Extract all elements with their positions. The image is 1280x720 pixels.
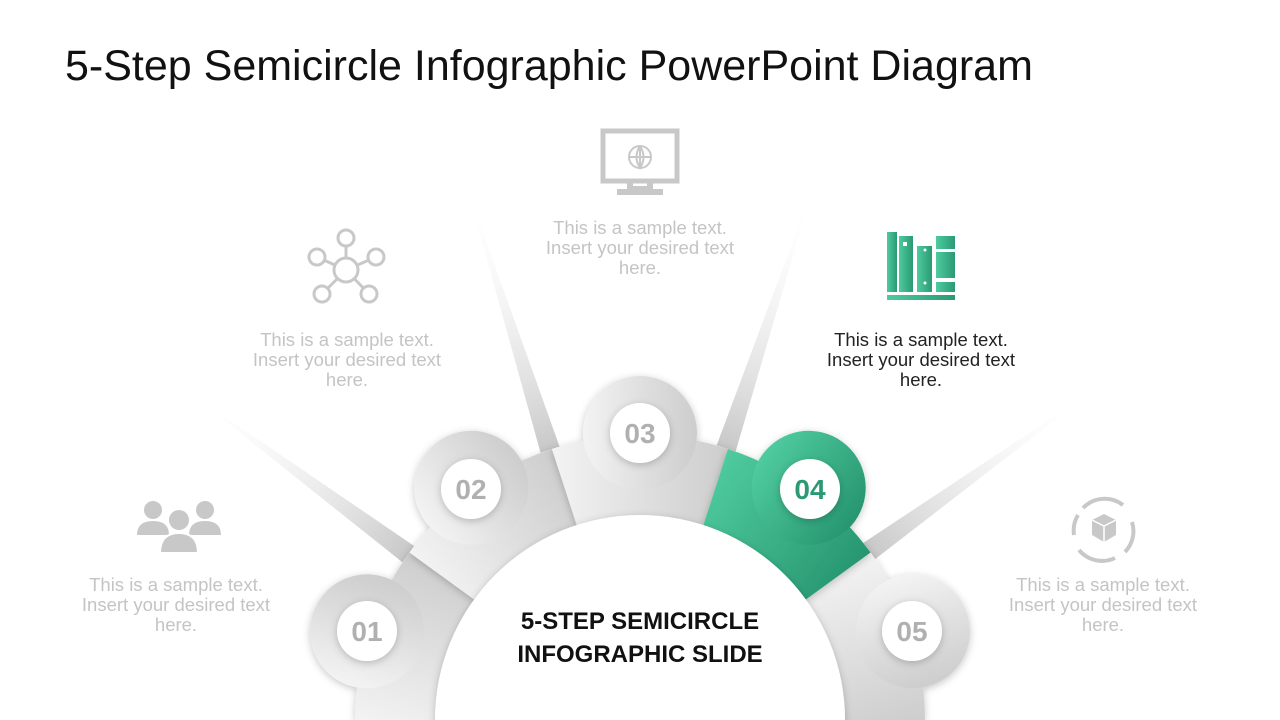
- text blocks: here.: [326, 369, 368, 390]
- number circles: 02: [455, 474, 487, 505]
- text blocks: This is a sample text.: [834, 329, 1008, 350]
- segment 02: [367, 390, 597, 614]
- text blocks: Insert your desired text: [253, 349, 441, 370]
- text blocks: This is a sample text.: [1016, 574, 1190, 595]
- text blocks: This is a sample text.: [260, 329, 434, 350]
- segment 01: [286, 530, 482, 720]
- number circles: [337, 403, 942, 661]
- number circles: 04: [794, 474, 826, 505]
- title: 5-Step Semicircle Infographic PowerPoint Diagram: [65, 42, 1033, 90]
- text blocks: Insert your desired text: [546, 237, 734, 258]
- text blocks: here.: [900, 369, 942, 390]
- segment 05: [798, 530, 994, 720]
- text blocks: here.: [1082, 614, 1124, 635]
- text blocks: Insert your desired text: [1009, 594, 1197, 615]
- icon: people: [137, 501, 221, 553]
- center circle: INFOGRAPHIC SLIDE: [517, 641, 763, 668]
- rays: [180, 184, 1098, 562]
- text blocks: This is a sample text.: [89, 574, 263, 595]
- center circle: [435, 515, 845, 720]
- icon: monitor: [603, 131, 677, 192]
- text blocks: here.: [619, 257, 661, 278]
- number circles: 03: [624, 418, 656, 449]
- number circles: 05: [896, 616, 928, 647]
- icon: books: [887, 232, 955, 300]
- text blocks: Insert your desired text: [827, 349, 1015, 370]
- center circle: 5-STEP SEMICIRCLE: [521, 608, 759, 635]
- icon: recycle box: [1074, 499, 1133, 561]
- text blocks: This is a sample text.: [553, 217, 727, 238]
- segment 04 (highlighted): [683, 390, 913, 614]
- text blocks: here.: [155, 614, 197, 635]
- text blocks: Insert your desired text: [82, 594, 270, 615]
- segment 03: [552, 376, 728, 525]
- icon: network: [309, 230, 384, 302]
- number circles: 01: [351, 616, 383, 647]
- text blocks: [82, 217, 1197, 635]
